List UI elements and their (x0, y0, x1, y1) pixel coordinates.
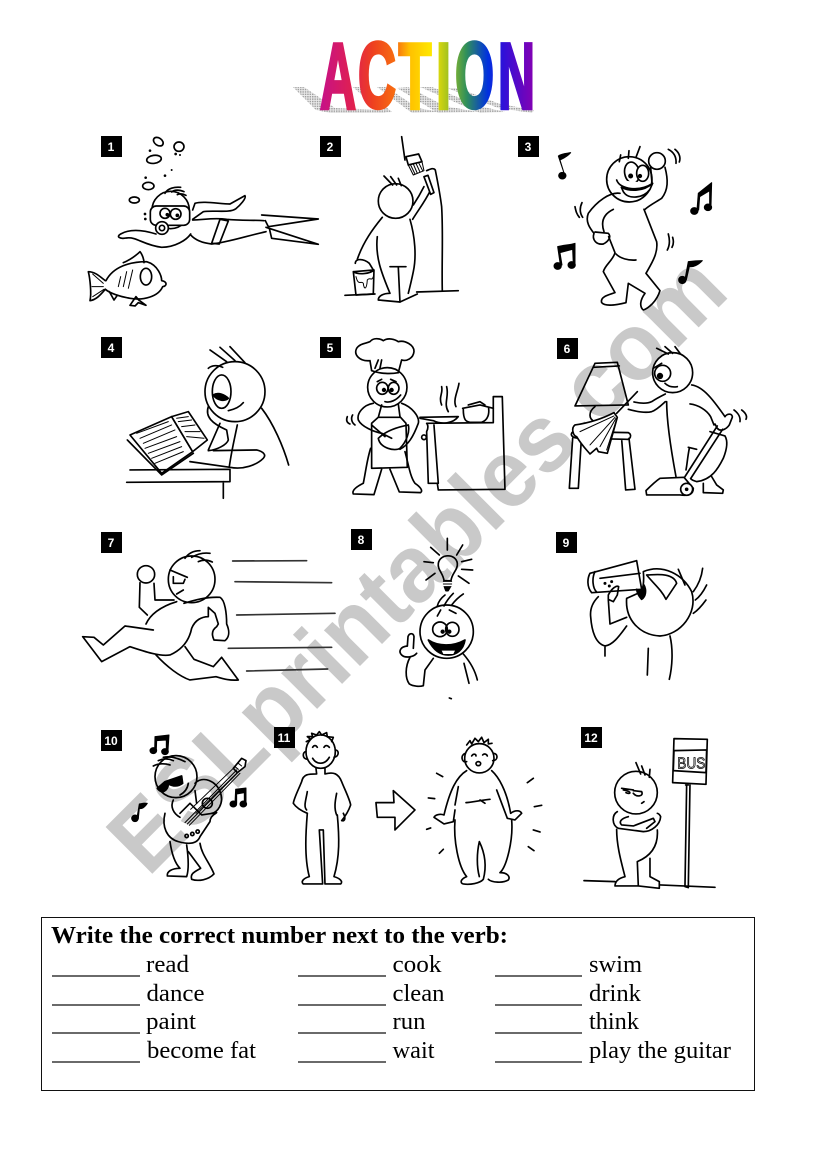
person drinking from a glass (588, 561, 707, 679)
verb column 3: swim (589, 952, 642, 978)
title: ACTION: A (320, 24, 356, 128)
number 1: 1 (108, 140, 115, 154)
number 8 (351, 529, 372, 550)
panel 2: paint (320, 136, 458, 302)
number 12 (581, 727, 602, 748)
running figure with speed lines (83, 551, 335, 680)
number 2 (320, 136, 341, 157)
title: ACTION (293, 22, 535, 128)
number 7: 7 (108, 536, 115, 550)
number 9: 9 (563, 536, 570, 550)
number 11: 11 (278, 731, 291, 745)
guitar player with sunglasses (132, 735, 247, 880)
title: ACTION: I (436, 24, 451, 128)
painter (345, 137, 458, 302)
arrow (376, 791, 415, 830)
panel 6: clean (557, 338, 746, 495)
number 1 (101, 136, 122, 157)
number 7 (101, 532, 122, 553)
person waiting at bus stop (584, 739, 715, 888)
dancer and music notes (554, 147, 712, 310)
person dusting and vacuuming (569, 347, 746, 495)
title shadow (293, 87, 534, 113)
verb column 1: become fat (147, 1038, 256, 1064)
verb column 2: run (392, 1009, 426, 1035)
number 4: 4 (108, 341, 115, 355)
number 3: 3 (525, 140, 532, 154)
watermark: ESLprintables.com (87, 234, 746, 893)
panel 10: play the guitar (101, 730, 247, 880)
number 11 (274, 727, 295, 748)
number 6 (557, 338, 578, 359)
verb column 2: wait (392, 1038, 435, 1064)
panel 11: become fat (274, 727, 542, 884)
number 5: 5 (327, 341, 334, 355)
verb column 1 (52, 952, 256, 1064)
verb column 3: play the guitar (589, 1038, 731, 1064)
title: ACTION: T (398, 24, 432, 128)
panel 7: run (83, 532, 335, 680)
verb column 2: clean (392, 981, 444, 1007)
panel 8: think (351, 529, 477, 699)
light bulb and thinking person (400, 538, 477, 699)
number 2: 2 (327, 140, 334, 154)
verb column 1: dance (146, 981, 204, 1007)
exercise box (42, 918, 754, 1090)
exercise heading: Write the correct number next to the verb: (51, 922, 508, 949)
number 10: 10 (104, 734, 118, 748)
number 10 (101, 730, 122, 751)
verb column 3 (495, 952, 731, 1064)
number 12: 12 (584, 731, 598, 745)
number 4 (101, 337, 122, 358)
number 6: 6 (564, 342, 571, 356)
panel 12: wait (581, 727, 715, 888)
panel 1: swim (88, 136, 318, 306)
verb column 2 (298, 952, 444, 1064)
title: ACTION: O (455, 22, 494, 128)
verb column 3: drink (589, 981, 641, 1007)
number 5 (320, 337, 341, 358)
title: ACTION: C (358, 22, 396, 128)
swimmer and fish (88, 136, 318, 306)
panel 4: read (101, 337, 289, 498)
number 9 (556, 532, 577, 553)
person waiting at bus stop: BUS (677, 755, 705, 772)
verb column 1: paint (146, 1009, 196, 1035)
panel 5: cook (320, 337, 505, 495)
verb column 1: read (146, 952, 189, 978)
panel 3: dance (518, 136, 712, 310)
chef and stove (347, 339, 505, 495)
panel 9: drink (556, 532, 707, 679)
title: ACTION: N (498, 24, 535, 128)
thin man (293, 732, 351, 884)
number 8: 8 (358, 533, 365, 547)
person reading a book (127, 347, 289, 498)
verb column 3: think (589, 1009, 639, 1035)
fat man (427, 737, 542, 884)
number 3 (518, 136, 539, 157)
verb column 2: cook (392, 952, 442, 978)
